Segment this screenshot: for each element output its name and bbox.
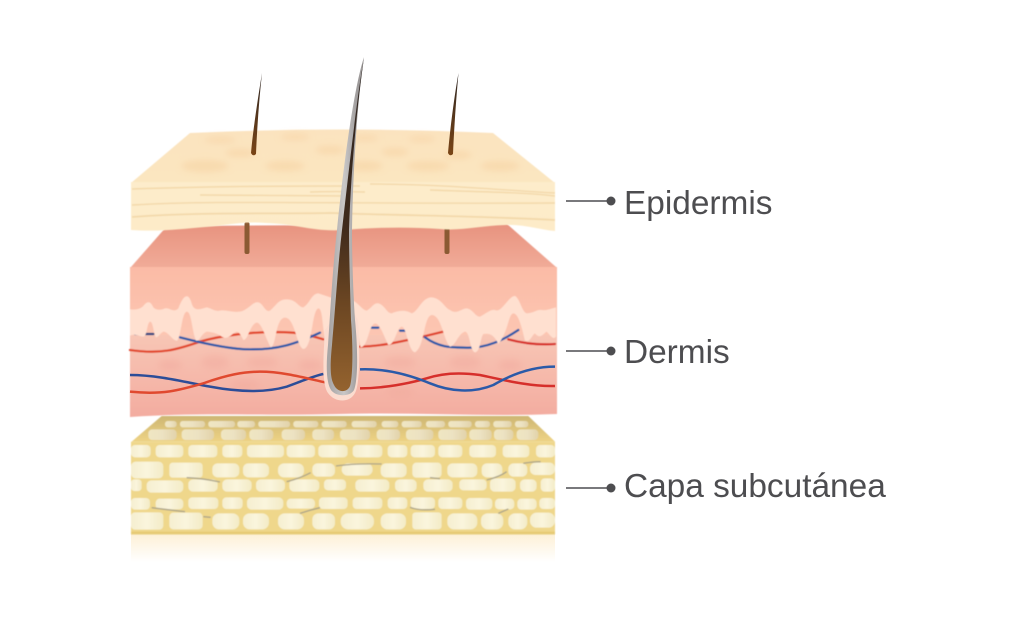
panel: dermis (130, 224, 557, 417)
epidermis front (131, 182, 555, 231)
label: Dermis: Dermis (624, 334, 730, 371)
hair sheath (327, 57, 364, 395)
label: Capa subcutánea: Capa subcutánea (624, 468, 886, 505)
panel: main hair follicle (323, 57, 364, 400)
dermis front lower (130, 335, 557, 417)
panel: epidermis (131, 130, 555, 231)
fat layer reflection (131, 534, 555, 562)
dermis front upper (130, 267, 557, 347)
panel: subcutaneous layer (131, 416, 555, 534)
label: Dermis (566, 334, 730, 371)
label: Epidermis: Epidermis (624, 185, 772, 222)
upper blood vessels (130, 328, 555, 352)
epidermis top surface (131, 130, 555, 183)
follicle halo (323, 300, 359, 400)
dermis pigment spots (158, 355, 522, 397)
icon: left small hair (251, 73, 262, 155)
icon: right small hair (448, 73, 458, 155)
cream papillae band (130, 293, 556, 352)
epidermis strata lines (132, 184, 555, 220)
panel: lower blood vessels (130, 367, 555, 393)
epidermis spots (181, 134, 520, 172)
connective fibres (152, 462, 541, 517)
hair stubs under epidermis (244, 222, 450, 254)
hair shaft (331, 58, 364, 391)
cell rows (131, 445, 555, 530)
dermis top surface (131, 224, 556, 267)
leader line (566, 200, 610, 202)
